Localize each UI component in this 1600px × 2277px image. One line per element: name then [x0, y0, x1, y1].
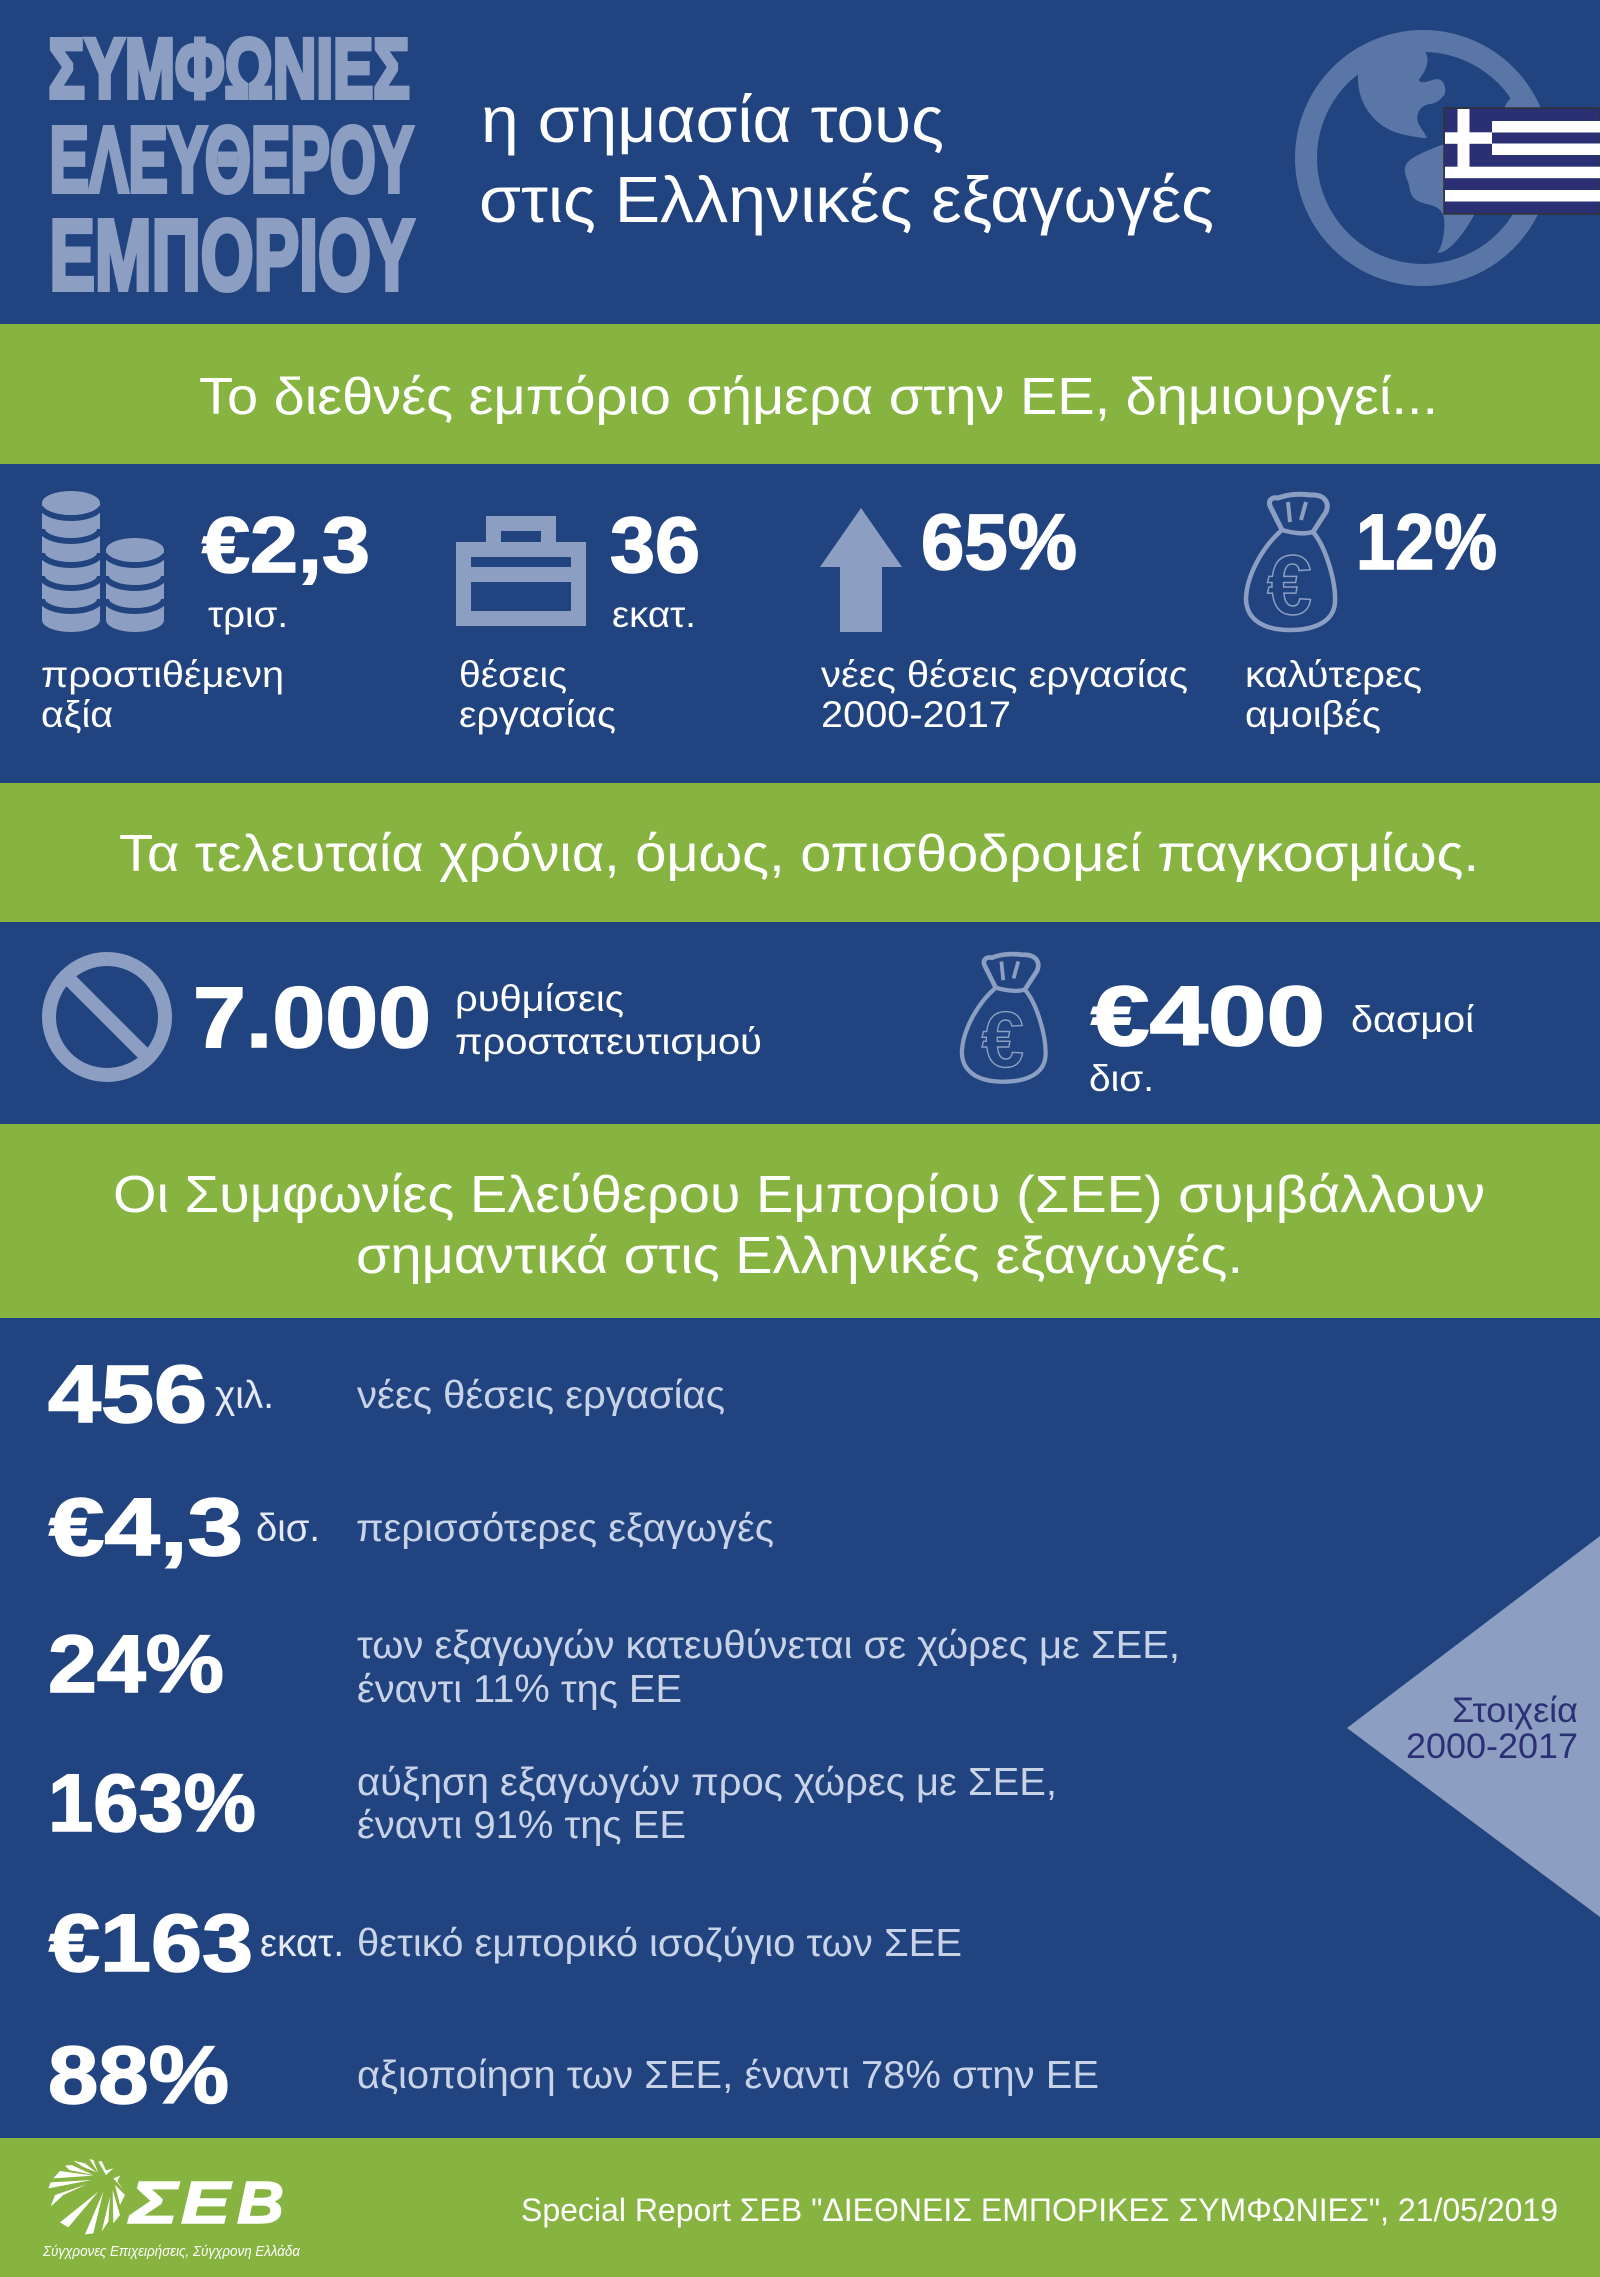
stat: 7.000 regulations: προστατευτισμού [455, 1021, 762, 1062]
stat: €2,3 trillion: αξία [41, 694, 113, 735]
panel: protectionism [49, 954, 1474, 1099]
row: 88% utilisation: 88% [48, 2030, 229, 2121]
stat: €400 billion tariffs: δισ. [1089, 1058, 1154, 1099]
title: Συμφωνίες Ελεύθερου Εμπορίου: ΕΜΠΟΡΙΟΥ [50, 200, 414, 312]
row: 456 thousand new jobs: 456 [48, 1349, 207, 1440]
icon: money bag: € [982, 996, 1024, 1084]
banner: FTAs contribute to Greek exports [0, 1124, 1600, 1318]
stat: 65% [821, 497, 1188, 735]
icon: money bag [962, 954, 1046, 1084]
row: 24% of exports: των εξαγωγών κατευθύνεται σε χώρες με ΣΕΕ, [357, 1624, 1180, 1667]
logo: ΣΕΒ: Β [237, 2170, 284, 2236]
title: Συμφωνίες Ελεύθερου Εμπορίου: ΣΥΜΦΩΝΙΕΣ [48, 22, 410, 116]
title: Συμφωνίες Ελεύθερου Εμπορίου: ΕΛΕΥΘΕΡΟΥ [50, 108, 414, 212]
stat: 12%: καλύτερες [1245, 654, 1422, 695]
stat: 65%: νέες θέσεις εργασίας [821, 654, 1188, 695]
row: 163% growth: 163% [48, 1758, 256, 1849]
row: €163 million balance [49, 1898, 962, 1989]
row: 24% of exports: έναντι 11% της ΕΕ [357, 1668, 682, 1711]
logo: ΣΕΒ: Σύγχρονες Επιχειρήσεις, Σύγχρονη Ελλάδα [42, 2243, 300, 2260]
stat: €400 billion tariffs [1089, 969, 1474, 1099]
panel: FTA figures [48, 1349, 1600, 2121]
row: 163% growth: αύξηση εξαγωγών προς χώρες με ΣΕΕ, [357, 1761, 1057, 1804]
row: €163 million balance: θετικό εμπορικό ισοζύγιο των ΣΕΕ [357, 1922, 962, 1965]
banner: FTAs contribute to Greek exports: σημαντικά στις Ελληνικές εξαγωγές. [356, 1227, 1243, 1285]
stat: 36 million [459, 500, 700, 735]
icon: globe [1306, 41, 1542, 275]
stat: 12%: αμοιβές [1245, 694, 1381, 735]
callout: data period 2000-2017 [1347, 1536, 1600, 1917]
stat: €400 billion tariffs: €400 [1091, 969, 1325, 1063]
stat: €2,3 trillion: €2,3 [202, 500, 370, 589]
stat: 36 million: εργασίας [459, 694, 616, 735]
stat: 65%: 2000-2017 [821, 694, 1011, 735]
stat: €2,3 trillion [41, 500, 370, 735]
icon: money bag: € [1267, 538, 1312, 632]
banner: FTAs contribute to Greek exports: Οι Συμφωνίες Ελεύθερου Εμπορίου (ΣΕΕ) συμβάλλουν [113, 1166, 1485, 1224]
row: 456 thousand new jobs [48, 1349, 725, 1440]
callout: data period 2000-2017: 2000-2017 [1406, 1727, 1578, 1766]
row: 24% of exports: 24% [48, 1619, 224, 1710]
stat: 65%: 65% [921, 497, 1077, 586]
banner: international trade today: Το διεθνές εμπόριο σήμερα στην ΕΕ, δημιουργεί... [199, 368, 1438, 426]
panel: trade stats [41, 491, 1497, 735]
icon: prohibition sign [49, 959, 165, 1075]
stat: €400 billion tariffs: δασμοί [1351, 999, 1474, 1040]
row: €163 million balance: εκατ. [260, 1922, 344, 1965]
stat: 7.000 regulations: 7.000 [193, 970, 431, 1066]
stat: 7.000 regulations [193, 970, 762, 1066]
source note: Special Report ΣΕΒ "ΔΙΕΘΝΕΙΣ ΕΜΠΟΡΙΚΕΣ ΣΥΜΦΩΝΙΕΣ", 21/05/2019 [521, 2192, 1558, 2228]
row: 88% utilisation: αξιοποίηση των ΣΕΕ, έναντι 78% στην ΕΕ [357, 2054, 1099, 2097]
header panel [48, 22, 1600, 312]
logo: ΣΕΒ [42, 2159, 300, 2260]
stat: 12% [1245, 497, 1497, 735]
banner: international trade today [0, 324, 1600, 464]
row: 456 thousand new jobs: χιλ. [215, 1374, 274, 1417]
row: €4,3 billion more exports [49, 1482, 774, 1573]
stat: €2,3 trillion: τρισ. [208, 594, 288, 635]
row: €4,3 billion more exports: δισ. [256, 1507, 320, 1550]
row: 88% utilisation [48, 2030, 1099, 2121]
stat: €2,3 trillion: προστιθέμενη [41, 654, 284, 695]
row: €163 million balance: €163 [49, 1898, 253, 1989]
icon: money bag [1246, 494, 1335, 632]
stat: 12%: 12% [1356, 497, 1497, 586]
stat: 7.000 regulations: ρυθμίσεις [455, 978, 624, 1019]
banner: regression in recent years: Τα τελευταία χρόνια, όμως, οπισθοδρομεί παγκοσμίως. [119, 825, 1479, 883]
row: €4,3 billion more exports: €4,3 [49, 1482, 243, 1573]
subtitle: στις Ελληνικές εξαγωγές [479, 163, 1214, 236]
row: 163% growth [48, 1758, 1057, 1849]
row: €4,3 billion more exports: περισσότερες εξαγωγές [356, 1507, 774, 1550]
logo: ΣΕΒ: Σ [127, 2170, 180, 2236]
icon: briefcase [456, 516, 586, 626]
row: 24% of exports [48, 1619, 1180, 1711]
stat: 36 million: εκατ. [612, 594, 696, 635]
stat: 36 million: θέσεις [459, 654, 567, 695]
footer panel [0, 2138, 1600, 2277]
title: Συμφωνίες Ελεύθερου Εμπορίου [48, 22, 414, 312]
subtitle: η σημασία τους [481, 83, 944, 156]
row: 163% growth: έναντι 91% της ΕΕ [357, 1804, 686, 1847]
subtitle [479, 83, 1214, 236]
icon: Greek flag [1444, 108, 1600, 214]
icon: up arrow [820, 508, 902, 632]
logo sunburst [48, 2159, 125, 2234]
stat: 36 million: 36 [610, 500, 700, 589]
callout: data period 2000-2017: Στοιχεία [1452, 1691, 1578, 1730]
banner: regression in recent years [0, 783, 1600, 922]
row: 456 thousand new jobs: νέες θέσεις εργασίας [357, 1374, 725, 1417]
logo: ΣΕΒ: Ε [181, 2170, 232, 2236]
icon: coins [42, 491, 164, 632]
